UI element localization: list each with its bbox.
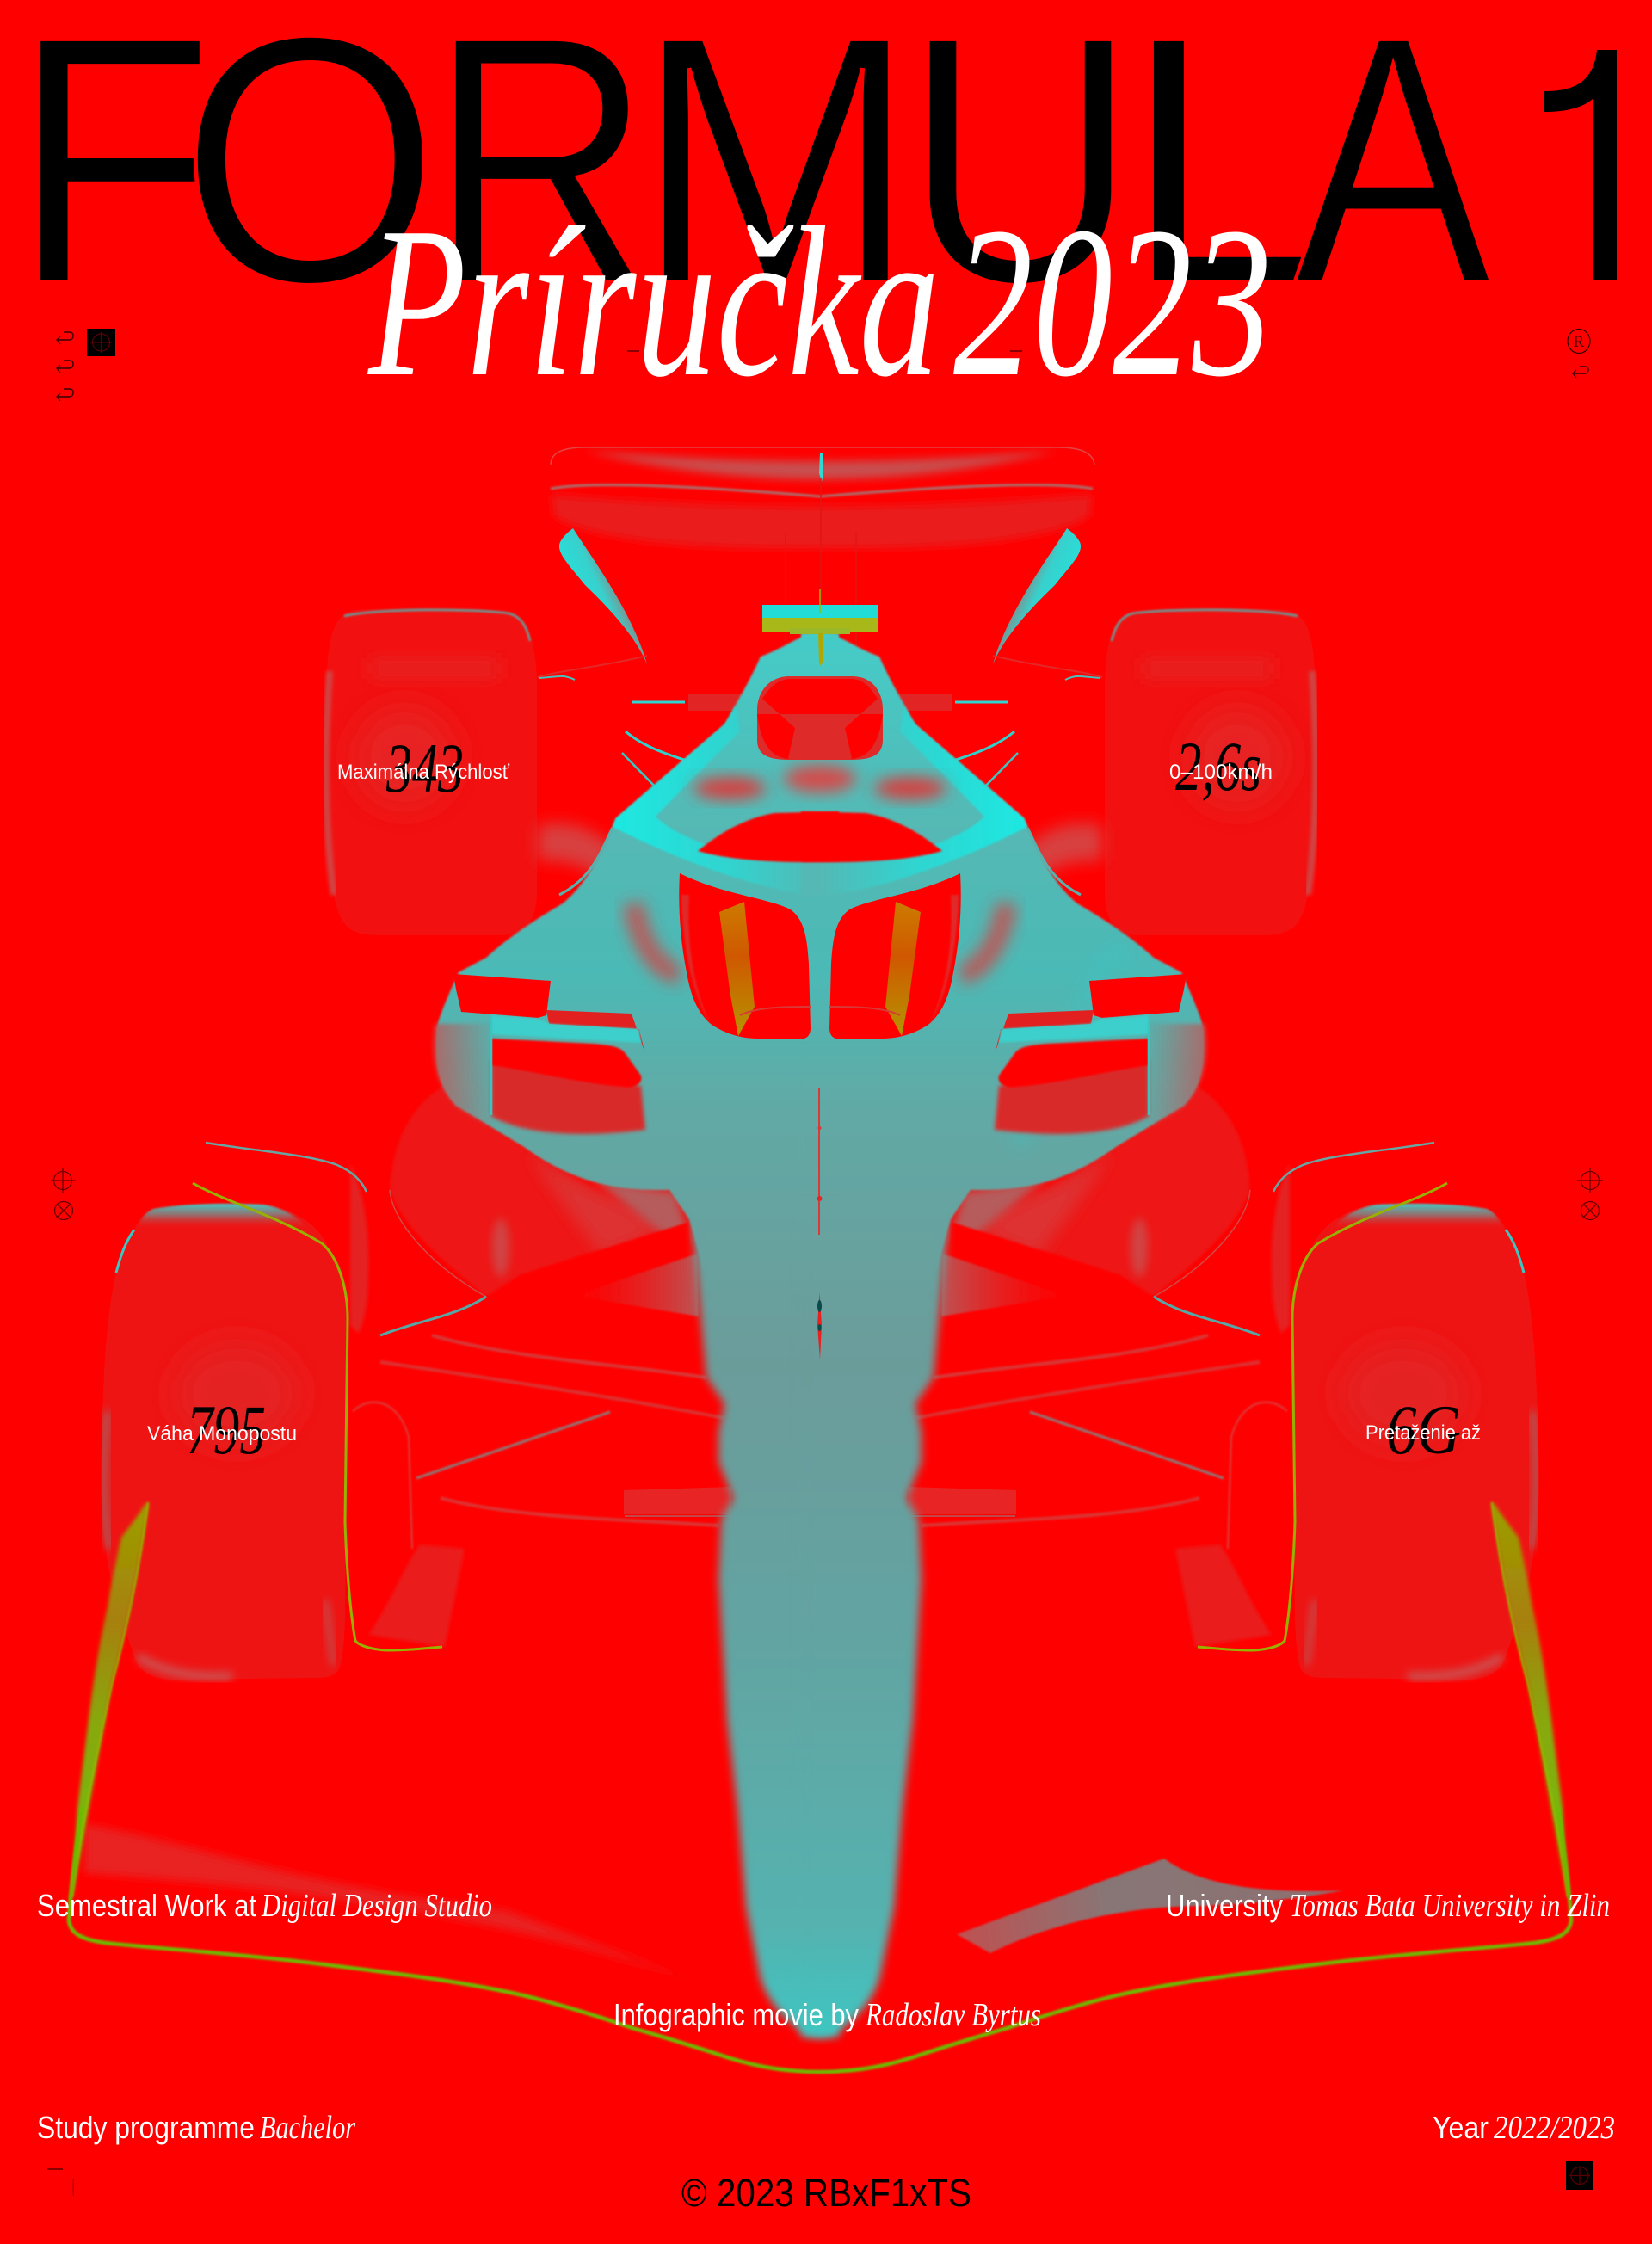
small marks in subtitle [627,350,1022,352]
front wing outline [69,1807,1571,2072]
credit: infographic movie [613,1997,1041,2033]
icon: registered mark and arrow: R [1574,333,1585,351]
credit: year: 2022/2023 [1494,2110,1615,2146]
stat: acceleration: 0–100km/h [1169,761,1273,784]
credit: infographic movie: Radoslav Byrtus [865,1997,1041,2033]
subtitle: Príručka 2023: Príručka [367,183,940,422]
icons: left crosshair markers [51,1168,76,1220]
subtitle: Príručka 2023: 2023 [953,183,1272,422]
credit: study programme: Bachelor [260,2110,355,2146]
credit: university: University [1166,1888,1283,1923]
rear wing [551,447,1094,654]
bargeboards and side arms [380,1087,1260,1335]
copyright: © 2023 RBxF1xTS [681,2171,971,2215]
stat: top speed: 343 [385,729,464,807]
title digit 1 [1544,50,1617,280]
credit: semestral work: Semestral Work at [37,1888,256,1923]
stat: weight: Váha Monopostu [147,1422,297,1446]
stat: top speed [337,729,510,807]
credit: year [1433,2110,1615,2146]
rear suspension [538,656,1102,878]
title: FORMULA 1 [11,0,1493,357]
front suspension [353,1335,1287,1647]
stat: top speed: Maximálna Rýchlosť [337,761,510,784]
icon: top left black square [87,329,115,356]
credit: infographic movie: Infographic movie by [613,1997,859,2032]
car body [433,633,1207,2037]
F1 car illustration [69,447,1571,2072]
stat: acceleration: 2,6s [1175,727,1261,805]
rear tyres [324,608,1317,935]
side intakes [453,974,1187,1134]
icons: right crosshair markers [1577,1168,1603,1220]
credit: semestral work [37,1888,492,1924]
credit: study programme: Study programme [37,2110,255,2145]
airbox window [757,676,883,760]
credit: year: Year [1433,2110,1489,2145]
icon: registered mark and arrow [1568,329,1590,378]
front wing surfaces [84,1824,1343,2005]
wing support struts [559,528,1081,664]
icon: bottom right black square [1566,2161,1593,2190]
credit: university [1166,1888,1610,1924]
stat: g-force: Pretaženie až [1365,1421,1481,1445]
credit: semestral work: Digital Design Studio [261,1888,492,1924]
icons: top left return arrows [57,332,73,401]
side openings with orange streaks [633,873,1007,1039]
green outline and end plates [72,1143,1568,1897]
icon: bottom left corner mark [47,2168,74,2196]
stat: weight: 795 [187,1390,266,1469]
front tyres [101,1163,1539,1680]
T-camera [762,589,878,666]
stat: g-force: 6G [1386,1390,1461,1469]
halo and cockpit [559,706,1081,897]
